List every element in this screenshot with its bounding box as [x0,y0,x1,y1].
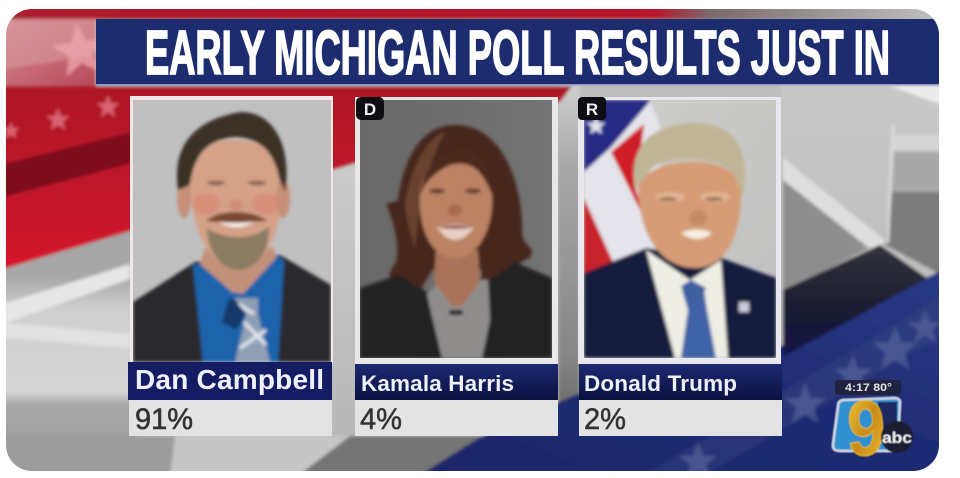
station time and temperature: 4:17 80° [845,382,892,394]
stars on red [2,18,119,138]
top strip [10,9,909,22]
name bar: Kamala Harris [361,371,514,396]
icon: channel 9 abc logo: abc [882,430,912,447]
party tag D [356,97,384,120]
vote share [579,400,782,436]
name bar [355,364,558,400]
navy flag panel [415,266,951,478]
candidate card: Dan Campbell [128,96,333,436]
portrait: Dan Campbell [133,100,331,362]
vote share: 2% [584,403,626,436]
portrait: Donald Trump [584,100,776,358]
party tag R: R [586,100,598,119]
station time and temperature [835,380,901,395]
party tag R [578,97,606,120]
title banner [96,19,956,88]
portrait: Kamala Harris [360,100,552,358]
candidate card: Kamala Harris [355,97,558,436]
name bar: Donald Trump [584,371,737,396]
party tag D: D [364,100,376,119]
candidate card: Donald Trump [578,97,782,436]
vote share: 91% [135,403,193,436]
name bar: Dan Campbell [135,364,324,395]
vote share: 4% [360,403,402,436]
icon: channel 9 abc logo [833,384,913,472]
vote share [129,400,332,436]
vote share [355,400,558,436]
red flag panel [0,86,572,270]
icon: channel 9 abc logo: 9 [847,384,885,472]
name bar [579,364,782,400]
